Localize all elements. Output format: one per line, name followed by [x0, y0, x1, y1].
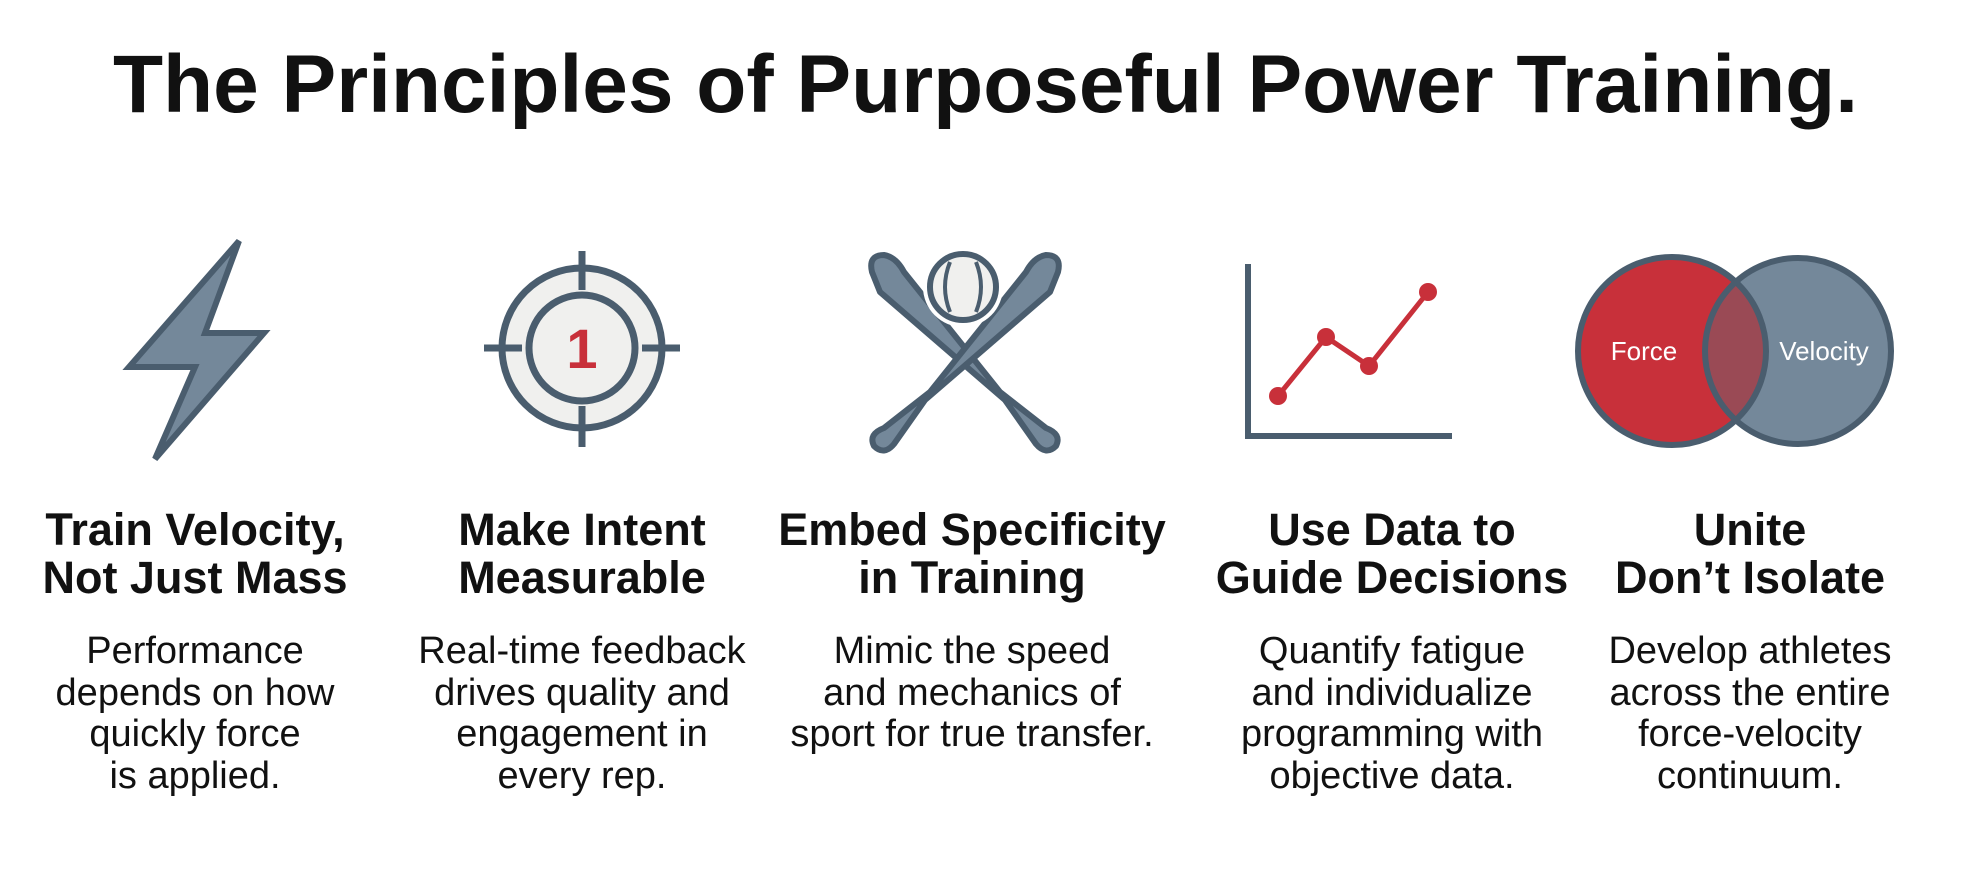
column 5 text: force-velocity [1638, 713, 1862, 755]
column 5 text: continuum. [1657, 754, 1843, 796]
title: The Principles of Purposeful Power Training. [113, 39, 1858, 130]
column 3 text [778, 504, 1166, 755]
column 3 text: and mechanics of [823, 672, 1121, 714]
column 5 text: Don’t Isolate [1615, 552, 1885, 603]
icon: line chart [1248, 264, 1452, 436]
column 5 text: across the entire [1610, 672, 1890, 714]
icon: target: 1 [566, 317, 598, 380]
column 4 text: objective data. [1269, 754, 1515, 796]
column 2 text: drives quality and [434, 672, 730, 714]
icon: venn diagram [1578, 257, 1891, 445]
column 1 text: Performance [86, 630, 304, 672]
column 4 text: Guide Decisions [1216, 552, 1568, 603]
column 3 text: in Training [858, 552, 1086, 603]
column 2 text: Real-time feedback [418, 630, 746, 672]
column 4 text [1216, 504, 1568, 796]
icon: venn diagram: Velocity [1779, 336, 1869, 366]
icon: venn diagram: Force [1611, 336, 1677, 366]
column 1 text: Not Just Mass [42, 552, 348, 603]
column 3 text: Embed Specificity [778, 504, 1166, 555]
column 2 text: Make Intent [458, 504, 706, 555]
column 5 text: Develop athletes [1608, 630, 1892, 672]
column 1 text: depends on how [56, 672, 334, 714]
column 2 text: engagement in [456, 713, 708, 755]
column 3 text: Mimic the speed [834, 630, 1110, 672]
column 2 text [418, 504, 746, 796]
column 4 text: and individualize [1252, 672, 1532, 714]
column 4 text: Use Data to [1268, 504, 1516, 555]
column 2 text: every rep. [498, 754, 666, 796]
column 2 text: Measurable [458, 552, 706, 603]
column 3 text: sport for true transfer. [790, 713, 1154, 755]
column 1 text: is applied. [109, 754, 281, 796]
column 5 text: Unite [1694, 504, 1806, 555]
column 5 text [1608, 504, 1892, 796]
column 4 text: Quantify fatigue [1259, 630, 1525, 672]
column 1 text [42, 504, 348, 796]
icon: baseball bats [871, 247, 1059, 451]
icon: lightning [129, 241, 264, 459]
icon: target [484, 251, 680, 447]
column 4 text: programming with [1241, 713, 1543, 755]
column 1 text: quickly force [89, 713, 301, 755]
column 1 text: Train Velocity, [45, 504, 345, 555]
